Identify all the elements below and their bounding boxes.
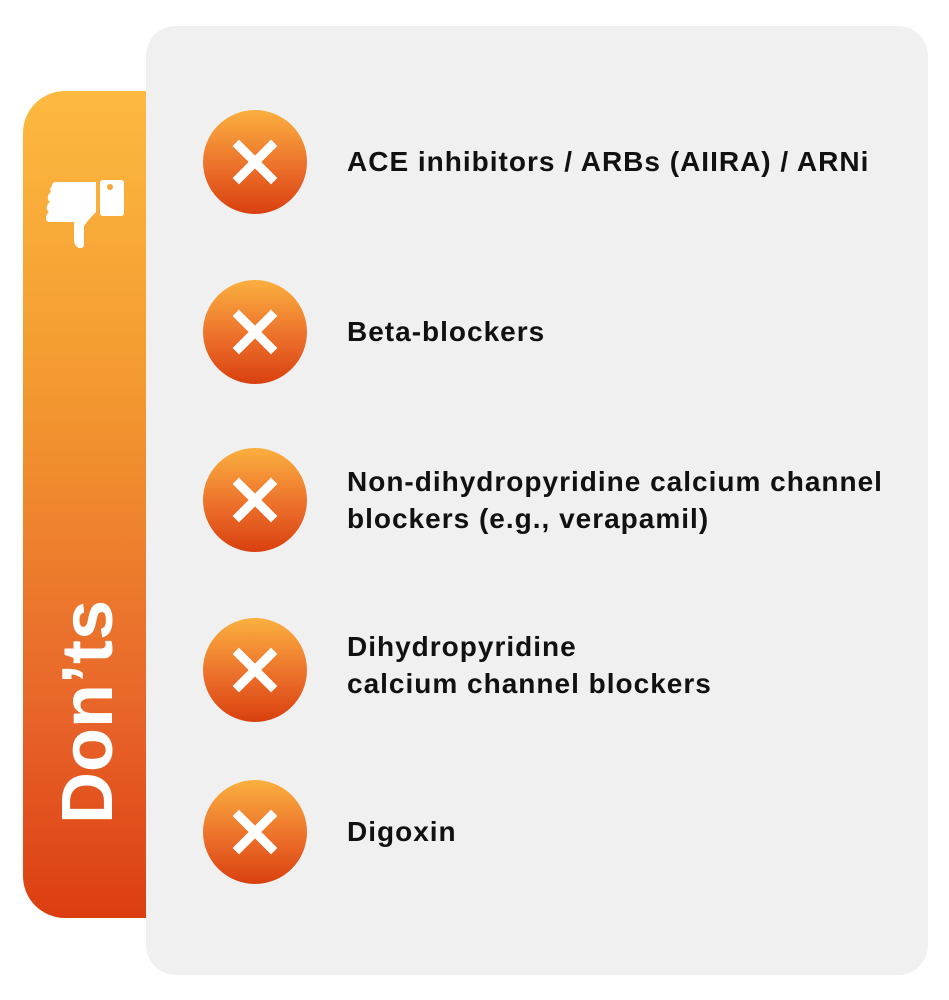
text: Beta-blockers <box>347 316 545 347</box>
text: Digoxin <box>347 816 457 847</box>
item 4 <box>203 618 712 722</box>
text <box>347 466 883 534</box>
icon: x badge <box>203 448 307 552</box>
text: Non-dihydropyridine calcium channel <box>347 466 883 497</box>
item 3 <box>203 448 883 552</box>
icon: thumbs down <box>46 180 124 248</box>
text: calcium channel blockers <box>347 668 712 699</box>
item 5 <box>203 780 457 884</box>
text: Dihydropyridine <box>347 631 577 662</box>
side bar <box>23 91 163 918</box>
text: blockers (e.g., verapamil) <box>347 503 709 534</box>
icon: x badge <box>203 780 307 884</box>
main panel <box>146 26 928 975</box>
text: ACE inhibitors / ARBs (AIIRA) / ARNi <box>347 146 869 177</box>
item 1 <box>203 110 869 214</box>
icon: x badge <box>203 618 307 722</box>
icon: x badge <box>203 110 307 214</box>
text <box>347 631 712 699</box>
icon: x badge <box>203 280 307 384</box>
item 2 <box>203 280 545 384</box>
heading: Don'ts: Don’ts <box>48 600 128 824</box>
